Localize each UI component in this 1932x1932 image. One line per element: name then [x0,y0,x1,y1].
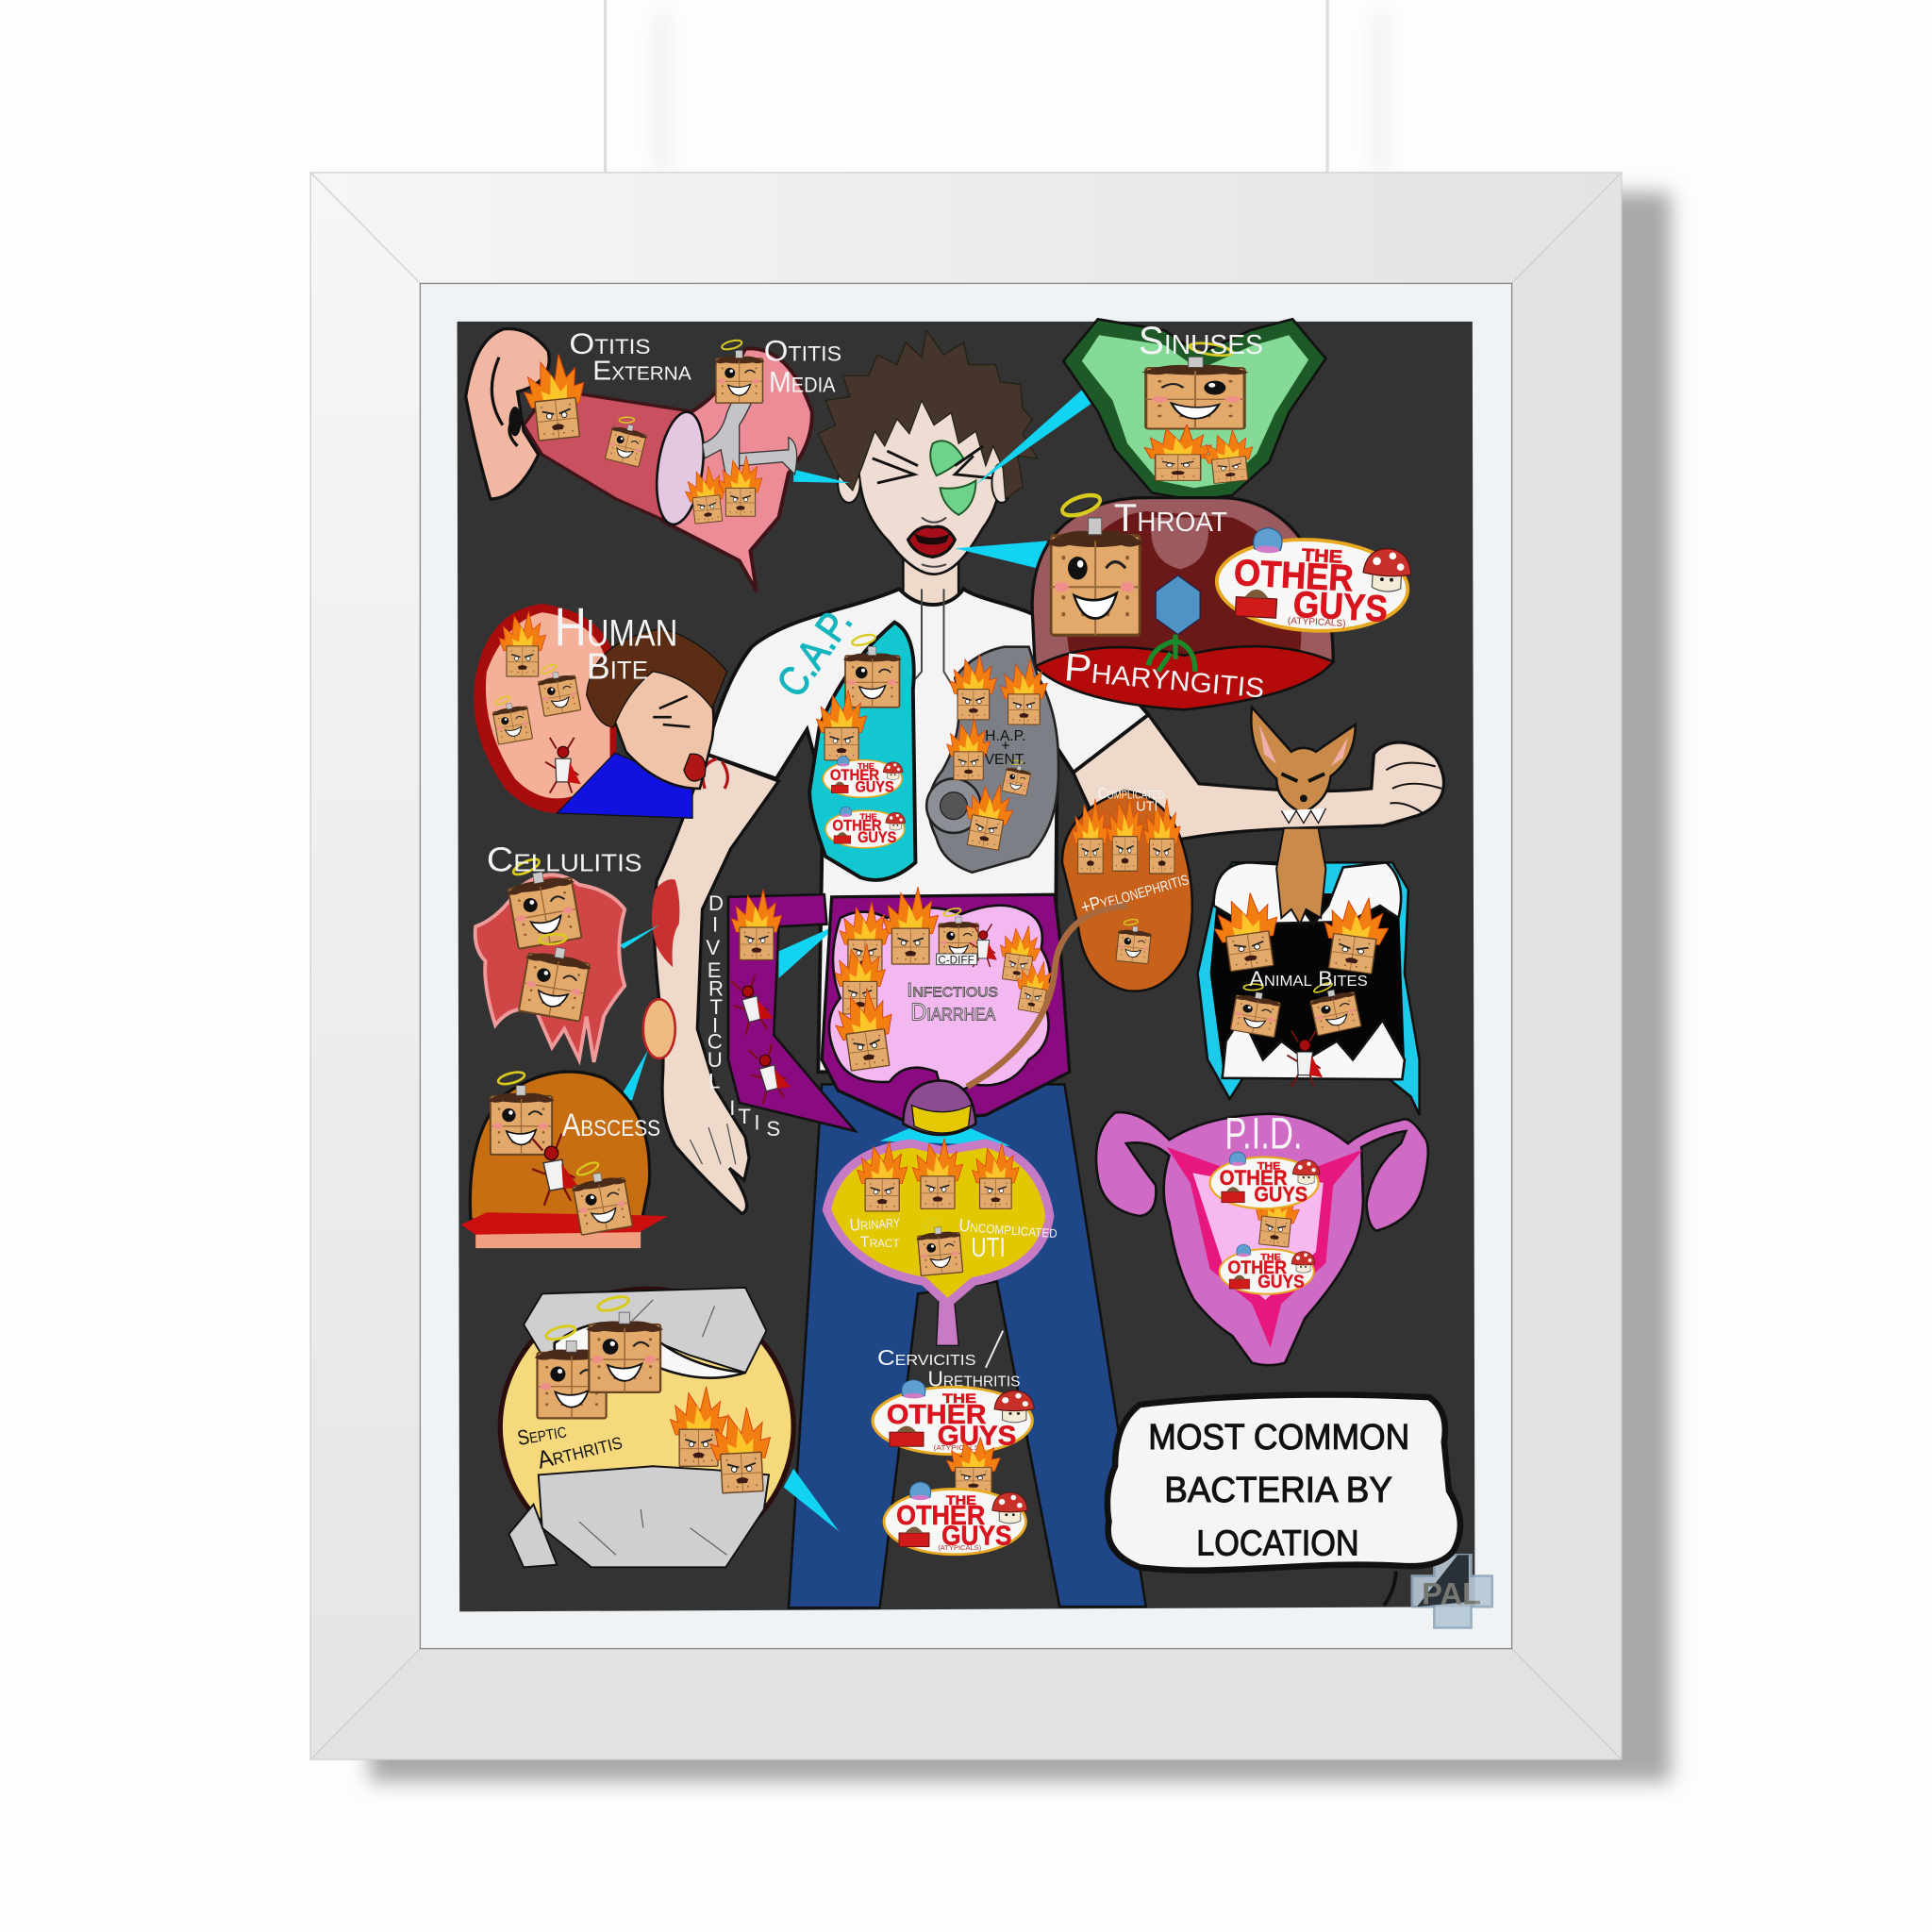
bladder dome [903,1080,975,1135]
infected sinuses on face [930,441,975,515]
panel: abscess [460,1070,668,1248]
badge: the other guys: THE [1301,545,1343,568]
poster dark background [458,322,1474,1611]
bacteria: otitis externa [521,352,590,441]
panel: human bite [474,597,727,818]
lower teeth [1223,1017,1405,1079]
figure: patient body [643,330,1444,1607]
frame shadow [370,192,1671,1782]
badge: the other guys: THE [1257,1161,1280,1173]
arm abscess bump [643,999,675,1058]
panel: otitis externa and media [466,327,841,591]
red base [460,1212,668,1235]
panel: septic arthritis: Arthritis [534,1425,625,1474]
arm wound [652,879,679,967]
label: urinary tract: Urinary [849,1210,901,1235]
tongue [1035,646,1333,709]
biter: hair [587,628,727,727]
title speech bubble: MOST COMMON [1148,1418,1409,1457]
eardrum [650,409,710,527]
badge: the other guys: GUYS [858,829,897,846]
panel: throat pharyngitis [1032,491,1413,709]
panel: cervicitis urethritis [873,1331,1034,1555]
nose and mouth [922,518,946,567]
bacteria: otitis media [714,339,764,403]
outer ear [466,328,549,499]
label: C.A.P.: C.A.P. [768,600,861,706]
panel: septic arthritis [500,1288,793,1567]
badge: the other guys: OTHER [1233,552,1355,599]
label: human bite: Human [555,597,677,658]
badge: the other guys: GUYS [855,779,894,796]
badge: the other guys: GUYS [1292,584,1389,630]
badge: the other guys: OTHER [830,767,879,784]
badge: the other guys [823,756,903,797]
panel: human bite: Bite [587,647,648,688]
badge: the other guys: OTHER [832,818,882,835]
badge: the other guys: THE [1260,1251,1281,1261]
label: animal bites: Animal Bites [1249,967,1368,991]
badge: the other guys: OTHER [1227,1257,1287,1278]
title speech bubble: LOCATION [1196,1524,1359,1563]
upper teeth [1214,862,1401,924]
label: septic arthritis: Septic [515,1418,568,1450]
right arm and fist [1074,715,1444,850]
uvula [1151,518,1208,569]
label: P.I.D.: P.I.D. [1224,1108,1303,1158]
badge: the other guys: OTHER [1220,1166,1288,1190]
upper bone [524,1288,766,1373]
hair [818,330,1038,499]
panel: community acquired pneumonia lung [768,600,915,880]
title speech bubble: BACTERIA BY [1164,1471,1392,1510]
badge: the other guys: THE [860,813,876,822]
bacteriophage [1156,575,1200,635]
blue saliva [1198,862,1420,1115]
panel: kidney pyelonephritis [1062,784,1192,991]
label: C-Diff: C-DIFF [938,954,974,966]
badge: the other guys: OTHER [896,1501,985,1531]
squinting eyes [873,446,991,483]
badge: the other guys: THE [858,762,874,771]
middle ear [663,348,812,591]
label: pharyngitis: Pharyngitis [1062,644,1267,707]
panel: diverticulitis [706,890,855,1141]
badge: the other guys: GUYS [1257,1272,1305,1292]
watermark: PAL logo [1412,1555,1492,1627]
label: complicated UTI: Complicated [1098,784,1165,802]
neck [903,548,958,610]
label: infectious diarrhea: Infectious [907,980,998,1002]
biter: shirt [557,753,692,818]
label: H.A.P. + vent: VENT. [985,752,1026,768]
badge: the other guys: GUYS [938,1420,1016,1451]
label: H.A.P. + vent: + [1001,738,1009,754]
left arm [655,754,778,1214]
badge: the other guys: OTHER [887,1398,987,1429]
lower bone [508,1466,769,1567]
panel: cellulitis [475,840,641,1062]
title speech bubble [1108,1395,1460,1606]
badge: the other guys [873,1380,1034,1455]
panel: sinuses [1063,318,1325,500]
panel: hospital acquired pneumonia mechanical lung [926,647,1058,873]
mouth interior [1210,893,1405,1066]
badge: the other guys: (ATYPICALS) [1288,616,1346,629]
panel: otitis externa and media: Media [769,365,836,398]
badge: the other guys [1210,1152,1320,1208]
panel: bladder urinary tract [826,1080,1058,1345]
label: cellulitis: Cellulitis [487,840,641,878]
panel: bladder urinary tract: UTI [971,1233,1006,1263]
label: throat: Throat [1114,495,1227,540]
panel: cervicitis urethritis: Urethritis [928,1366,1020,1391]
watermark: PAL logo: PAL [1422,1576,1481,1611]
bone texture [579,1300,727,1555]
cartilage [555,1323,745,1378]
badge: the other guys: (ATYPICALS) [938,1543,981,1552]
label: H.A.P. + vent: H.A.P. [985,728,1025,744]
picture frame [310,173,1622,1759]
biter: face [610,659,713,789]
badge: the other guys [1214,525,1413,636]
badge: the other guys: GUYS [1254,1182,1307,1206]
panel: infectious diarrhea intestines: Diarrhea [910,997,995,1025]
label: cervicitis urethritis: Cervicitis [877,1345,975,1370]
urethra [937,1293,958,1345]
hanging wires [604,0,1389,173]
ureter from kidney to bladder [967,906,1127,1087]
dog biting arm [1251,708,1356,924]
t-shirt [706,589,1148,1072]
badge: the other guys [884,1482,1027,1555]
label: abscess: Abscess [562,1108,660,1143]
panel: bladder urinary tract: Tract [860,1233,900,1251]
badge: the other guys: GUYS [941,1522,1011,1552]
panel: infectious diarrhea intestines [822,887,1070,1122]
bite mark [703,759,727,789]
label: pyelonephritis: +Pyelonephritis [1078,867,1191,919]
panel: kidney pyelonephritis: UTI [1136,799,1158,814]
label: diverticulitis: DIVERTICULITIS [706,891,780,1141]
label: otitis media: Otitis [764,335,841,368]
ear canal [524,394,708,524]
panel: otitis externa and media: Externa [592,356,691,386]
face [858,394,1002,575]
ossicles [702,367,797,480]
finger lines [690,1124,736,1164]
badge: the other guys [825,807,906,848]
jeans [789,1084,1146,1607]
panel: animal bites [1198,708,1420,1115]
label: uncomplicated UTI: Uncomplicated [958,1215,1058,1241]
label: sinuses: Sinuses [1139,318,1263,362]
badge: the other guys: (ATYPICALS) [934,1443,982,1452]
badge: the other guys [1220,1244,1315,1294]
callout pointers [620,385,1094,1532]
skin strip [475,1227,641,1248]
panel: pelvic inflammatory disease uterus [1096,1108,1428,1365]
badge: the other guys: THE [946,1492,976,1507]
label: otitis externa: Otitis [569,327,651,360]
trachea [906,589,955,690]
badge: the other guys: THE [942,1391,976,1407]
